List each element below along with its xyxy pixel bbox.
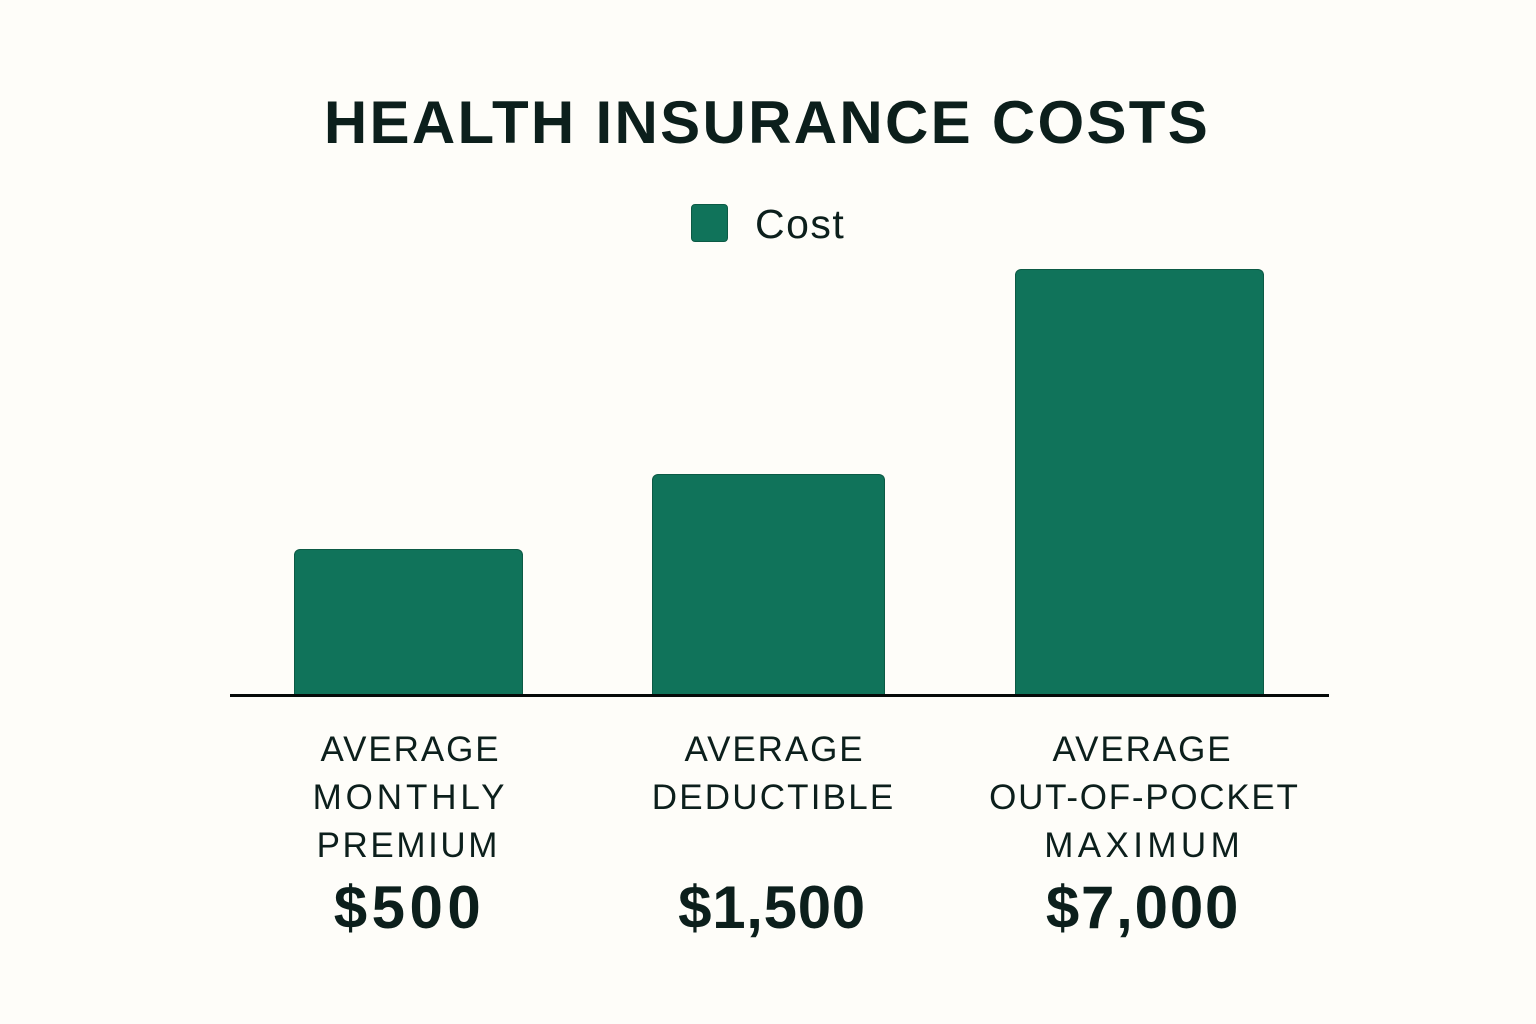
value: $7,000: $7,000 bbox=[1046, 874, 1240, 941]
category label: average out-of-pocket maximum: MAXIMUM bbox=[1044, 826, 1244, 865]
legend swatch bbox=[691, 204, 728, 242]
category label: average monthly premium: AVERAGE bbox=[321, 730, 500, 769]
category label: average out-of-pocket maximum: OUT-OF-POCKET bbox=[989, 778, 1300, 817]
category label: average deductible bbox=[652, 730, 895, 817]
category label: average monthly premium: PREMIUM bbox=[317, 826, 500, 865]
value: $1,500: $1,500 bbox=[678, 874, 866, 941]
bar: average out-of-pocket maximum bbox=[1015, 269, 1264, 695]
bar chart bbox=[230, 269, 1329, 697]
category label: average out-of-pocket maximum bbox=[989, 730, 1300, 865]
bar: average monthly premium bbox=[294, 549, 523, 695]
category label: average monthly premium: MONTHLY bbox=[313, 778, 508, 817]
bar: average deductible bbox=[652, 474, 885, 695]
axis line bbox=[230, 694, 1329, 696]
category label: average out-of-pocket maximum: AVERAGE bbox=[1053, 730, 1232, 769]
category label: average deductible: AVERAGE bbox=[685, 730, 864, 769]
category label: average deductible: DEDUCTIBLE bbox=[652, 778, 895, 817]
legend label: Cost bbox=[755, 201, 845, 247]
title: HEALTH INSURANCE COSTS bbox=[324, 89, 1210, 156]
category label: average monthly premium bbox=[313, 730, 508, 865]
legend bbox=[691, 201, 845, 247]
value: $500: $500 bbox=[334, 874, 485, 941]
